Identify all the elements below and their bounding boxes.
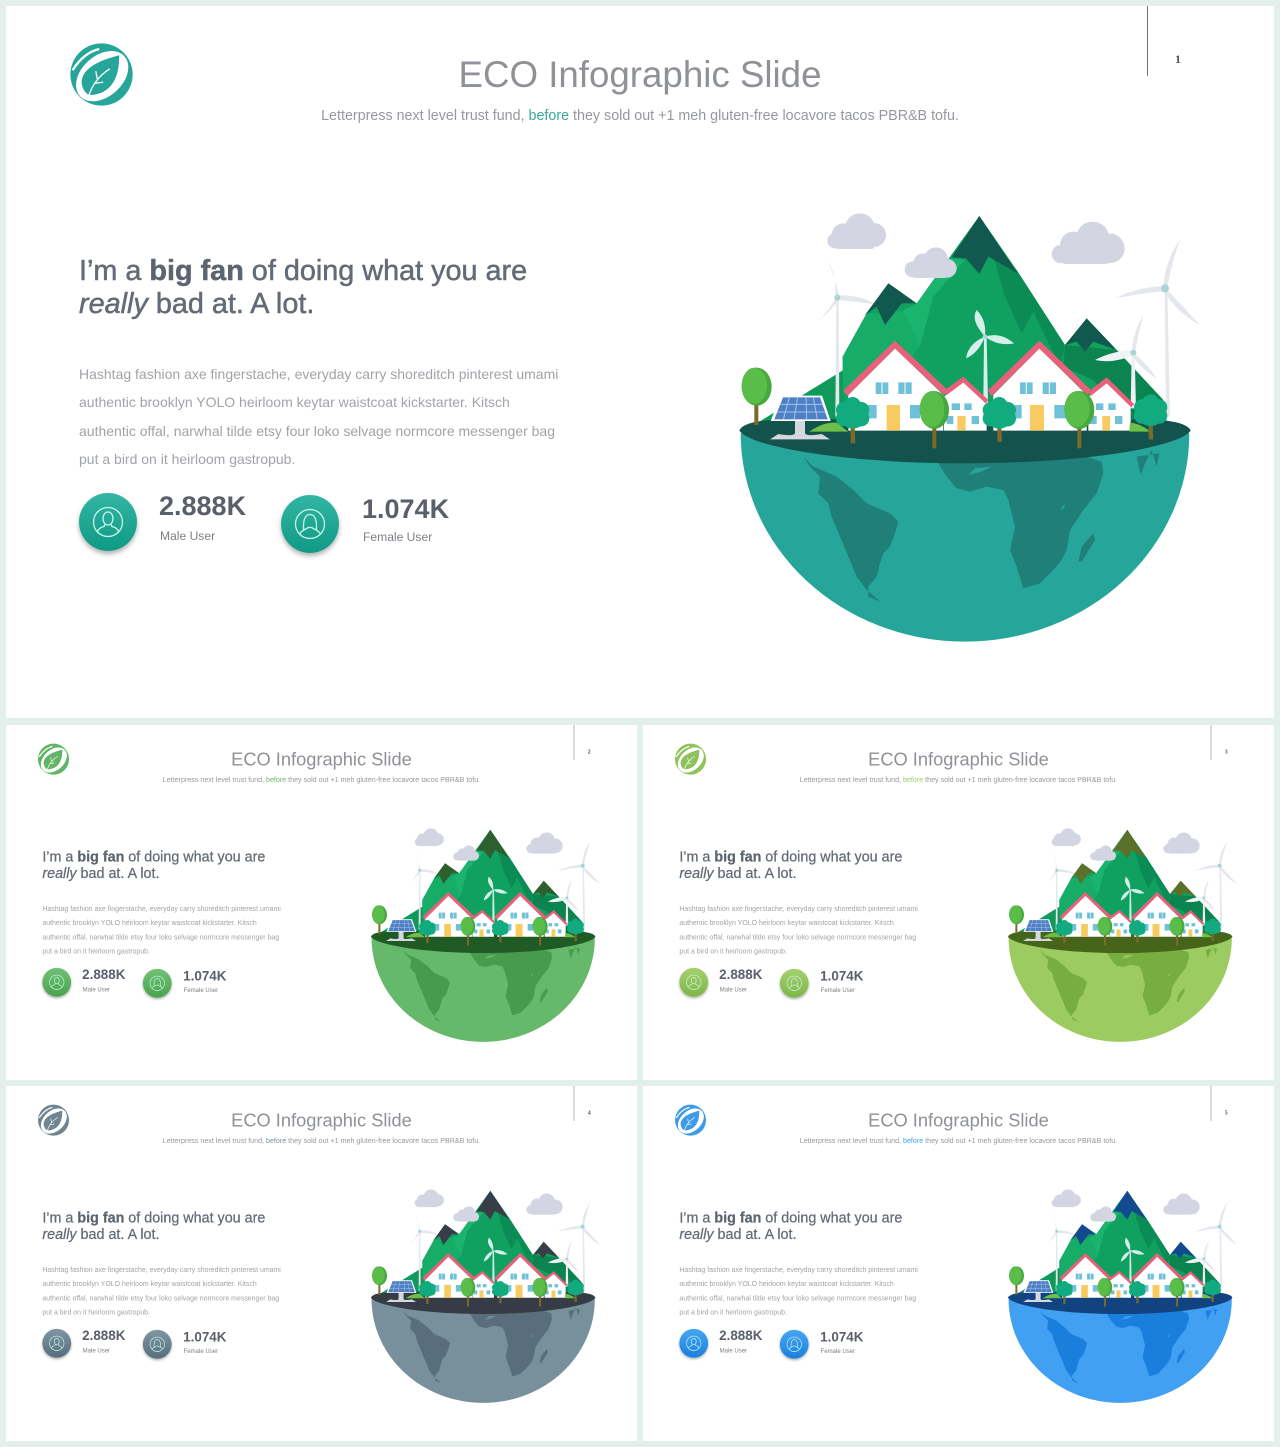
left hill (757, 370, 843, 430)
heading: really bad at. A lot. (42, 1226, 159, 1242)
hemisphere (741, 433, 1189, 642)
logo (675, 744, 706, 775)
stat value: female: 1.074K (820, 1329, 863, 1344)
stat label: male: Male User (83, 1347, 110, 1354)
cloud over mountain (905, 247, 957, 278)
mountain peaks (865, 216, 1117, 352)
stat label: female: Female User (363, 530, 432, 544)
illustration: half globe eco village (739, 213, 1200, 642)
body text: Hashtag fashion axe fingerstache, everyday carry shoreditch pinterest umami (79, 366, 558, 382)
house 3 (988, 341, 1092, 431)
body text (679, 904, 918, 955)
stat label: female: Female User (821, 986, 855, 993)
turbine: right tall (1115, 240, 1200, 417)
body text: authentic brooklyn YOLO heirloom keytar waistcoat kickstarter. Kitsch (679, 1280, 894, 1288)
body text: authentic offal, narwhal tilde etsy four loko selvage normcore messenger bag (679, 933, 916, 941)
body text: authentic offal, narwhal tilde etsy four loko selvage normcore messenger bag (79, 423, 555, 439)
house 4 (1088, 377, 1134, 431)
icon: female user (780, 969, 809, 998)
body text: Hashtag fashion axe fingerstache, everyday carry shoreditch pinterest umami (42, 904, 281, 912)
stat label: female: Female User (821, 1347, 855, 1354)
body text: authentic brooklyn YOLO heirloom keytar waistcoat kickstarter. Kitsch (79, 394, 510, 410)
illustration: half globe eco village (370, 828, 600, 1042)
heading (42, 1210, 265, 1242)
heading (79, 254, 527, 320)
subtitle: Letterpress next level trust fund, before they sold out +1 meh gluten-free locavore tacos PBR&B tofu. (800, 1137, 1117, 1145)
stat value: male: 2.888K (159, 491, 246, 521)
illustration: half globe eco village (1008, 828, 1236, 1042)
body text (42, 904, 281, 955)
house 2 (944, 377, 988, 431)
body text: put a bird on it heirloom gastropub. (79, 451, 295, 467)
stat label: female: Female User (184, 1347, 218, 1354)
stat label: male: Male User (83, 986, 110, 993)
subtitle: Letterpress next level trust fund, before they sold out +1 meh gluten-free locavore tacos PBR&B tofu. (163, 776, 480, 784)
heading: really bad at. A lot. (42, 865, 159, 881)
body text (42, 1265, 281, 1316)
trees round (742, 368, 1094, 448)
body text: authentic brooklyn YOLO heirloom keytar waistcoat kickstarter. Kitsch (42, 1280, 257, 1288)
heading: I’m a big fan of doing what you are (79, 254, 527, 286)
heading: I’m a big fan of doing what you are (42, 849, 265, 865)
body text: authentic brooklyn YOLO heirloom keytar waistcoat kickstarter. Kitsch (679, 919, 894, 927)
body text: Hashtag fashion axe fingerstache, everyday carry shoreditch pinterest umami (42, 1265, 281, 1273)
icon: female user (143, 969, 172, 998)
body text: authentic offal, narwhal tilde etsy four loko selvage normcore messenger bag (679, 1294, 916, 1302)
deck (739, 419, 1191, 463)
page number: 3 (1225, 748, 1228, 755)
page rule (1147, 6, 1148, 76)
stat value: male: 2.888K (719, 967, 762, 982)
logo (38, 1104, 69, 1136)
panel: main slide 1 teal (6, 6, 1274, 718)
panel: slide 3 lime (643, 725, 1274, 1080)
continents (803, 450, 1159, 602)
heading (679, 1210, 902, 1242)
title: ECO Infographic Slide (231, 1110, 412, 1130)
subtitle: Letterpress next level trust fund, before they sold out +1 meh gluten-free locavore tacos PBR&B tofu. (163, 1137, 480, 1145)
stat label: male: Male User (160, 529, 215, 543)
heading: really bad at. A lot. (79, 288, 314, 320)
heading: really bad at. A lot. (679, 865, 796, 881)
turbine: center (966, 310, 1014, 403)
panel: slide 5 blue (643, 1086, 1274, 1441)
body text (679, 1265, 918, 1316)
panel: slide 2 green (6, 725, 637, 1080)
page number: 5 (1225, 1109, 1228, 1116)
title: ECO Infographic Slide (231, 749, 412, 769)
body text: put a bird on it heirloom gastropub. (679, 1308, 787, 1316)
page rule (1210, 725, 1212, 760)
stat value: female: 1.074K (820, 968, 863, 983)
stat label: male: Male User (720, 1347, 747, 1354)
icon: male user (679, 1329, 708, 1358)
stat label: female: Female User (184, 986, 218, 993)
heading: I’m a big fan of doing what you are (42, 1210, 265, 1226)
heading (42, 849, 265, 882)
icon: female user (143, 1330, 172, 1359)
turbine: right small (1095, 315, 1157, 408)
body text: Hashtag fashion axe fingerstache, everyday carry shoreditch pinterest umami (679, 1265, 918, 1273)
body text: put a bird on it heirloom gastropub. (679, 947, 787, 955)
title: ECO Infographic Slide (458, 54, 822, 95)
panel: slide 4 gray (6, 1086, 637, 1441)
icon: female user (780, 1330, 809, 1359)
subtitle: Letterpress next level trust fund, before they sold out +1 meh gluten-free locavore tacos PBR&B tofu. (321, 108, 959, 124)
solar panel (770, 396, 831, 439)
body text: put a bird on it heirloom gastropub. (42, 1308, 150, 1316)
logo (38, 744, 69, 775)
page number: 4 (588, 1109, 591, 1116)
icon: female user (281, 495, 339, 553)
icon: male user (79, 493, 137, 551)
page rule (573, 1086, 575, 1121)
body text: authentic offal, narwhal tilde etsy four loko selvage normcore messenger bag (42, 933, 279, 941)
heading (679, 849, 902, 882)
page number: 1 (1175, 52, 1181, 66)
stat value: male: 2.888K (719, 1328, 762, 1343)
logo (675, 1104, 706, 1136)
turbine: left (812, 262, 877, 417)
page rule (1210, 1086, 1212, 1121)
stat value: female: 1.074K (183, 1329, 226, 1344)
title: ECO Infographic Slide (868, 1110, 1049, 1130)
icon: male user (42, 1329, 71, 1358)
title: ECO Infographic Slide (868, 749, 1049, 769)
mountains (843, 216, 1168, 433)
illustration: half globe eco village (1008, 1189, 1236, 1403)
icon: male user (679, 968, 708, 997)
stat label: male: Male User (720, 986, 747, 993)
trees bushy (836, 394, 1167, 443)
stat value: female: 1.074K (183, 968, 226, 983)
body text: authentic offal, narwhal tilde etsy four loko selvage normcore messenger bag (42, 1294, 279, 1302)
stat value: female: 1.074K (362, 494, 449, 524)
house 1 (843, 341, 948, 431)
subtitle: Letterpress next level trust fund, before they sold out +1 meh gluten-free locavore tacos PBR&B tofu. (800, 776, 1117, 784)
illustration: half globe eco village (370, 1189, 600, 1403)
logo (70, 43, 133, 106)
stat value: male: 2.888K (82, 967, 125, 982)
body text: Hashtag fashion axe fingerstache, everyday carry shoreditch pinterest umami (679, 904, 918, 912)
body text: put a bird on it heirloom gastropub. (42, 947, 150, 955)
stat value: male: 2.888K (82, 1328, 125, 1343)
page rule (573, 725, 575, 760)
page number: 2 (588, 748, 591, 755)
heading: really bad at. A lot. (679, 1226, 796, 1242)
heading: I’m a big fan of doing what you are (679, 849, 902, 865)
icon: male user (42, 968, 71, 997)
heading: I’m a big fan of doing what you are (679, 1210, 902, 1226)
clouds (827, 213, 1125, 264)
body text: authentic brooklyn YOLO heirloom keytar waistcoat kickstarter. Kitsch (42, 919, 257, 927)
grass mounds (809, 423, 1150, 432)
body text (79, 366, 558, 467)
